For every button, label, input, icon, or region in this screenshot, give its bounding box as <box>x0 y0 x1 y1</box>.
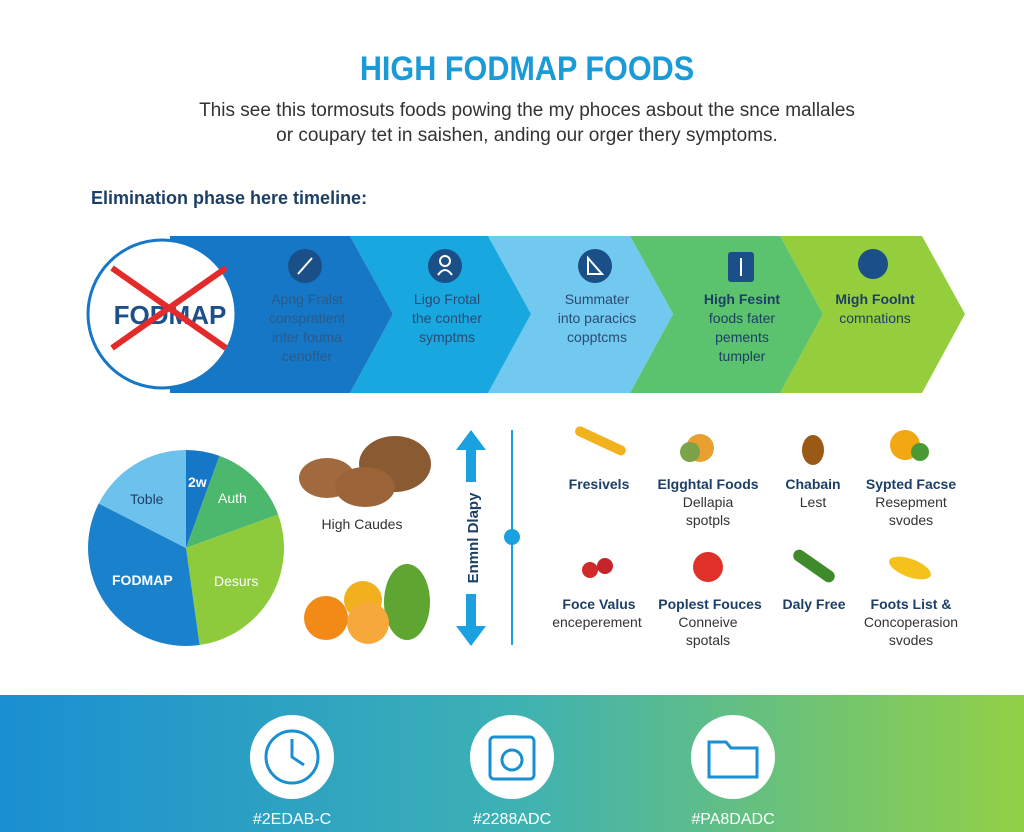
pie chart: Desurs <box>214 573 258 589</box>
food grid: spotpls <box>686 512 730 528</box>
food grid <box>552 425 958 648</box>
pie chart: 2w <box>188 474 207 490</box>
food grid: Lest <box>800 494 826 510</box>
icon: no FODMAP circle <box>88 240 236 388</box>
step texts: the conther <box>412 310 482 326</box>
food grid: Sypted Facse <box>866 476 956 492</box>
food grid: Resepment <box>875 494 947 510</box>
food grid: enceperement <box>552 614 642 630</box>
food grid: svodes <box>889 632 933 648</box>
step texts: copptcms <box>567 329 627 345</box>
food grid: Chabain <box>785 476 841 492</box>
step texts: Migh Foolnt <box>835 291 915 307</box>
step texts: tumpler <box>719 348 766 364</box>
step texts: symptms <box>419 329 475 345</box>
food grid: spotals <box>686 632 730 648</box>
step texts: Summater <box>565 291 629 307</box>
food grid: Concoperasion <box>864 614 958 630</box>
step texts: foods fater <box>709 310 775 326</box>
pie chart <box>88 450 284 646</box>
food grid: Daly Free <box>782 596 846 612</box>
food grid: Poplest Fouces <box>658 596 762 612</box>
food images: High Caudes <box>322 516 402 532</box>
timeline: #PA8DADC <box>691 811 775 828</box>
step texts: High Fesint <box>704 291 780 307</box>
vertical arrow <box>456 430 520 646</box>
timeline: #2EDAB-C <box>253 811 331 828</box>
step texts: Ligo Frotal <box>414 291 480 307</box>
step texts: conspratient <box>269 310 345 326</box>
food grid: Foce Valus <box>562 596 636 612</box>
section heading: Elimination phase here timeline: <box>91 188 367 208</box>
step texts <box>269 291 915 364</box>
vertical arrow: Enmnl Dlapy <box>465 492 482 583</box>
step icons <box>288 249 888 283</box>
title: HIGH FODMAP FOODS <box>360 50 694 88</box>
step texts: pements <box>715 329 769 345</box>
step texts: comnations <box>839 310 911 326</box>
step texts: Apng Fralst <box>271 291 343 307</box>
step texts: cenoffer <box>282 348 332 364</box>
icon: no FODMAP circle: FODMAP <box>114 300 226 330</box>
step texts: inter fouma <box>272 329 342 345</box>
timeline: #2288ADC <box>473 811 551 828</box>
food grid: Conneive <box>678 614 738 630</box>
food grid: Dellapia <box>683 494 733 510</box>
subtitle: This see this tormosuts foods powing the my phoces asbout the snce mallales <box>199 100 855 121</box>
food grid: Elgghtal Foods <box>657 476 759 492</box>
subtitle: or coupary tet in saishen, anding our orger thery symptoms. <box>276 125 778 146</box>
subtitle <box>199 100 855 146</box>
food grid: Foots List & <box>871 596 951 612</box>
food images <box>299 436 431 644</box>
food grid: Fresivels <box>569 476 630 492</box>
pie chart: Auth <box>218 490 247 506</box>
pie chart: FODMAP <box>112 572 173 588</box>
step texts: into paracics <box>558 310 636 326</box>
food grid: svodes <box>889 512 933 528</box>
pie chart: Toble <box>130 491 164 507</box>
